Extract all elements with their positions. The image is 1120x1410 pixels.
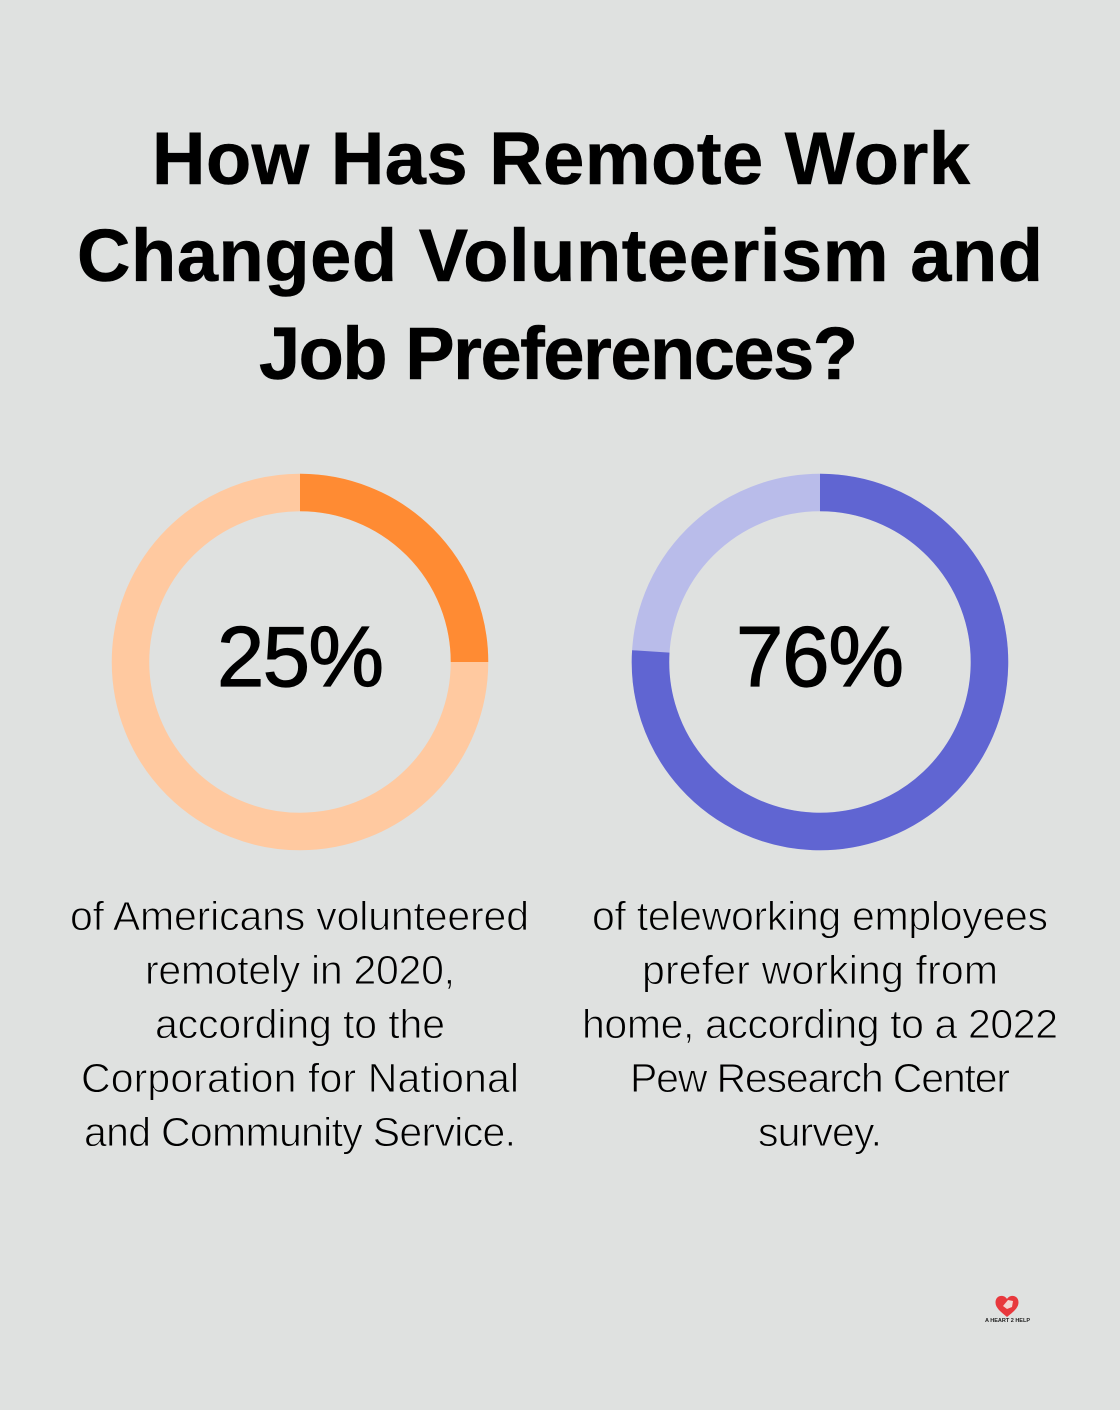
text block: 76% description: of teleworking employees xyxy=(592,893,1048,939)
text block: 76% description: Pew Research Center xyxy=(630,1055,1010,1101)
text block: 76% description: home, according to a 2022 xyxy=(582,1001,1058,1047)
title: Job Preferences? xyxy=(259,312,858,395)
stat: 25%: 25% xyxy=(217,610,384,705)
logo wordmark: A HEART 2 HELP xyxy=(985,1318,1030,1324)
title: Changed Volunteerism and xyxy=(77,214,1043,297)
text block: 25% description: and Community Service. xyxy=(84,1109,516,1155)
text block: 76% description: prefer working from xyxy=(642,947,998,993)
panel: 25% volunteered remotely xyxy=(70,492,529,1155)
text block: 76% description: survey. xyxy=(758,1109,882,1155)
logo: A Heart 2 Help xyxy=(985,1296,1030,1324)
text block: 25% description: according to the xyxy=(155,1001,445,1047)
title xyxy=(77,117,1043,395)
text block: 25% description xyxy=(70,893,529,1155)
donut chart: 76% xyxy=(650,492,990,832)
text block: 25% description: remotely in 2020, xyxy=(145,947,455,993)
icon: heart with hand xyxy=(996,1296,1018,1317)
title: How Has Remote Work xyxy=(152,117,971,200)
panel: 76% prefer working from home xyxy=(582,492,1058,1155)
text block: 25% description: Corporation for National xyxy=(81,1055,519,1101)
donut chart: 25% xyxy=(130,492,470,832)
text block: 25% description: of Americans volunteered xyxy=(70,893,529,939)
text block: 76% description xyxy=(582,893,1058,1155)
stat: 76%: 76% xyxy=(736,610,904,705)
